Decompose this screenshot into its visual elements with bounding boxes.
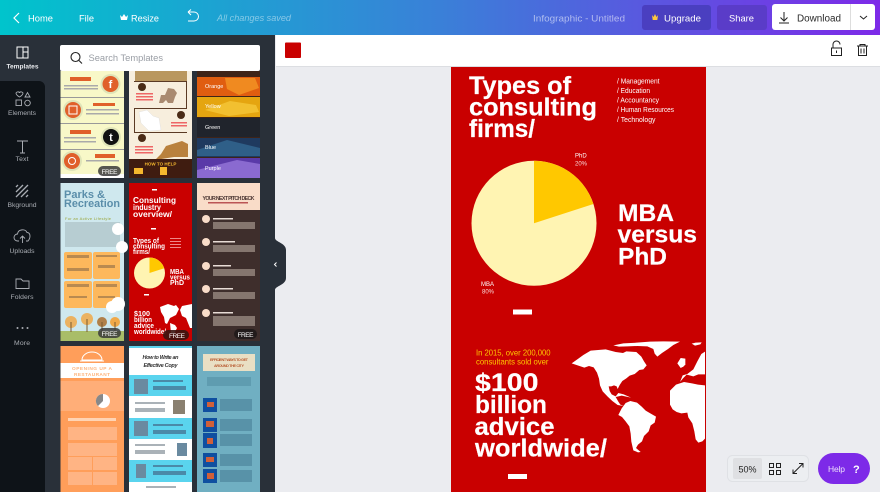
help button — [818, 453, 870, 484]
heading: MBA versus PhD — [618, 200, 697, 270]
download button: Download — [797, 14, 841, 24]
template thumbnail: consulting industry overview: overview/ — [133, 210, 173, 219]
editor toolbar — [276, 35, 880, 67]
tab: More: More — [14, 340, 30, 347]
template thumbnail: social media: f — [109, 79, 113, 91]
tab: Folders — [10, 279, 34, 301]
tab: Templates: Templates — [6, 64, 39, 70]
template thumbnail: parks and recreation — [60, 183, 128, 341]
search box: Search Templates — [88, 53, 164, 63]
template thumbnail: colour palette: Orange — [205, 84, 223, 90]
title: Types of — [469, 72, 572, 100]
tab: Uploads: Uploads — [10, 248, 35, 255]
left icon sidebar — [0, 35, 46, 492]
template thumbnail: consulting industry overview: $100 — [134, 311, 150, 318]
tab: Text — [16, 141, 29, 163]
heading: MBA versus PhD: MBA — [618, 200, 674, 227]
icon: magnifier — [71, 52, 82, 64]
tab: Elements: Elements — [8, 110, 37, 117]
template thumbnail: consulting industry overview: industry — [133, 203, 161, 212]
share button — [717, 5, 767, 30]
divider dash — [508, 474, 527, 479]
template thumbnail: efficient ways to get around — [197, 346, 260, 492]
big statement: billion — [475, 391, 547, 419]
upgrade button: Upgrade — [664, 14, 701, 24]
pie label: MBA: MBA — [481, 282, 494, 288]
document title: Infographic - Untitled — [533, 14, 625, 24]
intro text — [476, 348, 551, 366]
panel collapse handle — [274, 238, 286, 290]
template thumbnail: consulting industry overview: FREE — [169, 333, 186, 340]
template thumbnail: consulting industry overview: firms/ — [133, 249, 150, 256]
template thumbnail: pitch deck — [197, 183, 260, 341]
intro text: In 2015, over 200,000 — [476, 348, 551, 358]
help button: Help — [828, 464, 845, 474]
pie label: MBA — [481, 282, 495, 296]
template thumbnail: pet care — [129, 71, 192, 178]
template thumbnail: pitch deck: YOUR NEXT PITCH DECK — [202, 196, 255, 202]
colour swatch — [285, 42, 301, 58]
template thumbnail: social media: FREE — [102, 169, 118, 176]
template thumbnail: consulting industry overview: advice — [134, 323, 154, 330]
template thumbnail: effective copy: How to Write an — [142, 355, 179, 361]
template thumbnail: consulting industry overview — [129, 183, 192, 341]
template thumbnail: parks and recreation: For an Active Lifestyle — [65, 216, 112, 221]
save status: All changes saved — [216, 13, 292, 23]
big statement — [474, 369, 607, 463]
template thumbnail: parks and recreation: FREE — [102, 331, 118, 338]
template thumbnail: effective copy: Effective Copy — [144, 363, 178, 369]
download button — [772, 4, 875, 30]
list of consulting types: / Technology — [617, 117, 656, 124]
list of consulting types — [617, 78, 674, 124]
template thumbnail: consulting industry overview: worldwide/ — [133, 329, 166, 336]
pie label: PhD — [575, 154, 588, 168]
zoom controls: 50% — [738, 464, 756, 474]
infographic poster — [451, 67, 708, 492]
list of consulting types: / Human Resources — [617, 107, 674, 114]
help button: ? — [853, 464, 860, 476]
tab: Templates — [6, 47, 39, 70]
icon: back chevron — [14, 13, 19, 23]
divider dash — [513, 310, 532, 314]
template thumbnail: consulting industry overview: billion — [134, 317, 152, 324]
heading: MBA versus PhD: versus — [618, 222, 697, 249]
big statement: $100 — [475, 369, 538, 397]
world map — [572, 341, 705, 452]
template thumbnail: restaurant — [60, 346, 124, 492]
icon: trash — [857, 44, 868, 56]
template thumbnail: colour palette: Blue — [205, 145, 216, 151]
template thumbnail: pet care: HOW TO HELP — [145, 162, 176, 166]
icon: undo arrow — [188, 10, 198, 21]
template thumbnail: restaurant: OPENING UP A — [72, 366, 113, 372]
template thumbnail: colour palette — [197, 71, 260, 178]
template thumbnail: social media: t — [109, 132, 113, 144]
nav: File: File — [79, 14, 94, 24]
nav: Resize: Resize — [131, 14, 159, 24]
template thumbnail: consulting industry overview: PhD — [170, 280, 184, 287]
nav: Home: Home — [28, 14, 53, 24]
share button: Share — [729, 14, 754, 24]
big statement: worldwide/ — [474, 435, 607, 463]
template thumbnail: efficient ways to get around: AROUND THE CITY — [214, 364, 244, 368]
templates panel background — [46, 35, 275, 492]
template thumbnail: restaurant: RESTAURANT — [74, 372, 110, 378]
list of consulting types: / Management — [617, 78, 660, 86]
title — [469, 72, 597, 143]
heading: MBA versus PhD: PhD — [618, 243, 667, 270]
tab: Background — [8, 185, 37, 209]
pie label: PhD: 20% — [575, 162, 588, 168]
intro text: consultants sold over — [476, 356, 549, 366]
top navigation bar — [0, 0, 880, 35]
pie label: MBA: 80% — [482, 290, 495, 296]
template thumbnail: colour palette: Green — [205, 125, 220, 131]
tab: Uploads — [10, 230, 35, 255]
icon: fullscreen arrows — [793, 464, 803, 474]
list of consulting types: / Accountancy — [617, 98, 659, 104]
template thumbnail: colour palette: Purple — [205, 166, 221, 172]
template thumbnail: consulting industry overview: Types of — [133, 238, 160, 245]
template thumbnail: parks and recreation: Parks & — [64, 189, 105, 201]
big statement: advice — [474, 413, 555, 441]
title: firms/ — [469, 115, 535, 143]
tab: Elements — [8, 92, 37, 117]
icon: resize crown — [120, 14, 128, 20]
template thumbnail: efficient ways to get around: EFFICIENT WAYS TO GET — [210, 358, 249, 362]
tab: More — [14, 327, 30, 347]
zoom controls — [728, 456, 808, 482]
search box — [60, 45, 260, 71]
pie chart — [472, 161, 596, 286]
template thumbnail: colour palette: Yellow — [205, 104, 221, 110]
icon: unlock — [832, 41, 842, 56]
template thumbnail: pitch deck: FREE — [238, 332, 254, 339]
tab: Folders: Folders — [10, 294, 34, 301]
title: consulting — [469, 94, 597, 122]
template thumbnail: effective copy — [129, 346, 192, 492]
pie label: PhD: PhD — [575, 154, 587, 160]
template thumbnail: consulting industry overview: MBA — [170, 269, 184, 276]
template thumbnail: consulting industry overview: versus — [170, 274, 190, 282]
list of consulting types: / Education — [617, 88, 650, 95]
tab: Text: Text — [16, 156, 29, 163]
template thumbnail: social media — [60, 71, 124, 178]
icon: grid view — [770, 464, 780, 474]
template thumbnail: consulting industry overview: Consulting — [133, 196, 176, 205]
template thumbnail: parks and recreation: Recreation — [64, 198, 120, 210]
template thumbnail: consulting industry overview: consulting — [133, 244, 165, 250]
tab: Background: Bkground — [8, 202, 37, 209]
upgrade button — [642, 5, 711, 30]
